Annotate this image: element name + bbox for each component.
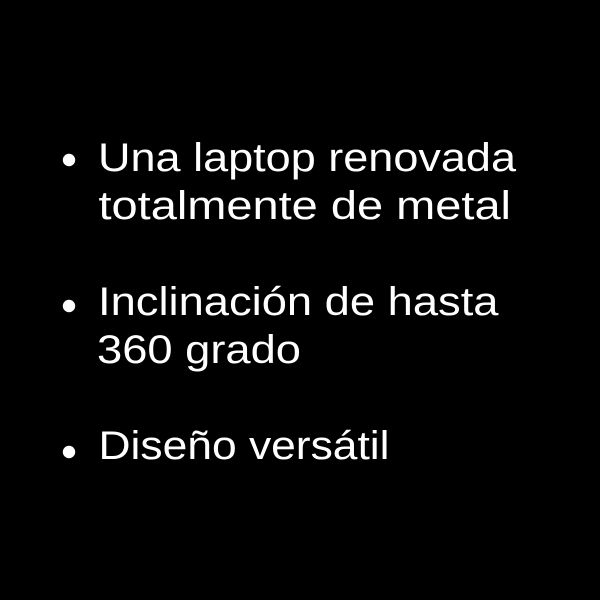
bullet xyxy=(63,300,75,312)
text line 1: Inclinación de hasta xyxy=(98,280,499,324)
text line 1: Una laptop renovada xyxy=(98,136,517,180)
list item: 360 tilt xyxy=(63,280,499,372)
text line 2: totalmente de metal xyxy=(98,184,511,228)
bullet xyxy=(63,446,75,458)
text line 1: Diseño versátil xyxy=(98,424,390,468)
bullet xyxy=(63,154,75,166)
list item: metal laptop xyxy=(63,136,517,228)
list item: versatile design xyxy=(63,424,390,468)
text line 2: 360 grado xyxy=(97,328,301,372)
